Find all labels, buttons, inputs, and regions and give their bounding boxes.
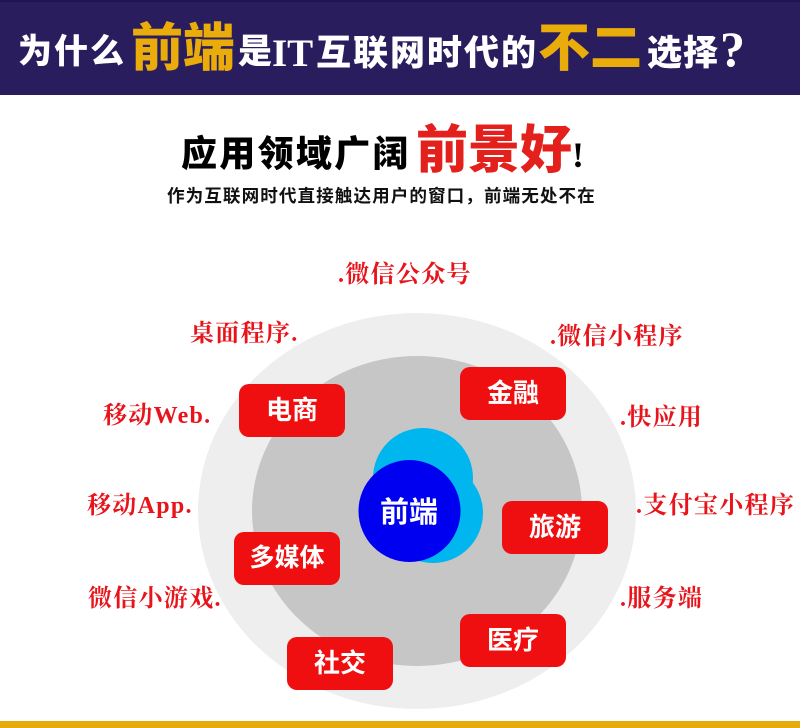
- category: 社交: [287, 637, 393, 690]
- title: 选择: [647, 34, 719, 73]
- center label: 前端: [380, 497, 438, 529]
- category: 金融: 金融: [487, 378, 539, 408]
- caption: 作为互联网时代直接触达用户的窗口，前端无处不在: [167, 186, 596, 206]
- outer ring: [198, 313, 636, 709]
- subheading: 前景好: [416, 122, 572, 180]
- blue core: [358, 460, 460, 562]
- category: 金融: [460, 367, 566, 420]
- header banner: [0, 0, 800, 95]
- title: 是: [238, 34, 272, 71]
- title: 互联网时代的: [316, 34, 538, 73]
- category: 医疗: 医疗: [487, 625, 539, 655]
- light blue blobs: [373, 428, 483, 563]
- subheading: 应用领域广阔: [181, 133, 411, 174]
- category: 电商: [239, 384, 345, 437]
- label: 支付宝小程序: .支付宝小程序: [636, 493, 795, 519]
- label: 微信公众号: .微信公众号: [338, 262, 472, 288]
- category: 社交: 社交: [314, 648, 366, 678]
- footer bar: [0, 721, 800, 728]
- label: 微信小游戏: 微信小游戏.: [88, 586, 222, 612]
- inner ring: [252, 356, 582, 666]
- category: 医疗: [460, 614, 566, 667]
- category: 电商: 电商: [266, 395, 318, 425]
- subheading: !: [572, 135, 584, 175]
- subheading: [181, 122, 584, 180]
- category: 旅游: 旅游: [529, 512, 581, 542]
- label: 移动App: 移动App.: [87, 493, 193, 519]
- label: 桌面程序: 桌面程序.: [190, 321, 298, 347]
- title: 不二: [538, 21, 642, 78]
- label: 服务端: .服务端: [620, 586, 703, 612]
- category: 旅游: [502, 501, 608, 554]
- label: 微信小程序: .微信小程序: [550, 324, 684, 350]
- title: ?: [720, 21, 745, 77]
- category: 多媒体: 多媒体: [249, 544, 324, 572]
- label: 快应用: .快应用: [620, 405, 703, 431]
- title: IT: [272, 32, 313, 75]
- title: 前端: [131, 21, 235, 78]
- title: 为什么: [18, 34, 126, 71]
- label: 移动Web: 移动Web.: [103, 403, 211, 429]
- title: [18, 21, 745, 78]
- category: 多媒体: [234, 532, 340, 585]
